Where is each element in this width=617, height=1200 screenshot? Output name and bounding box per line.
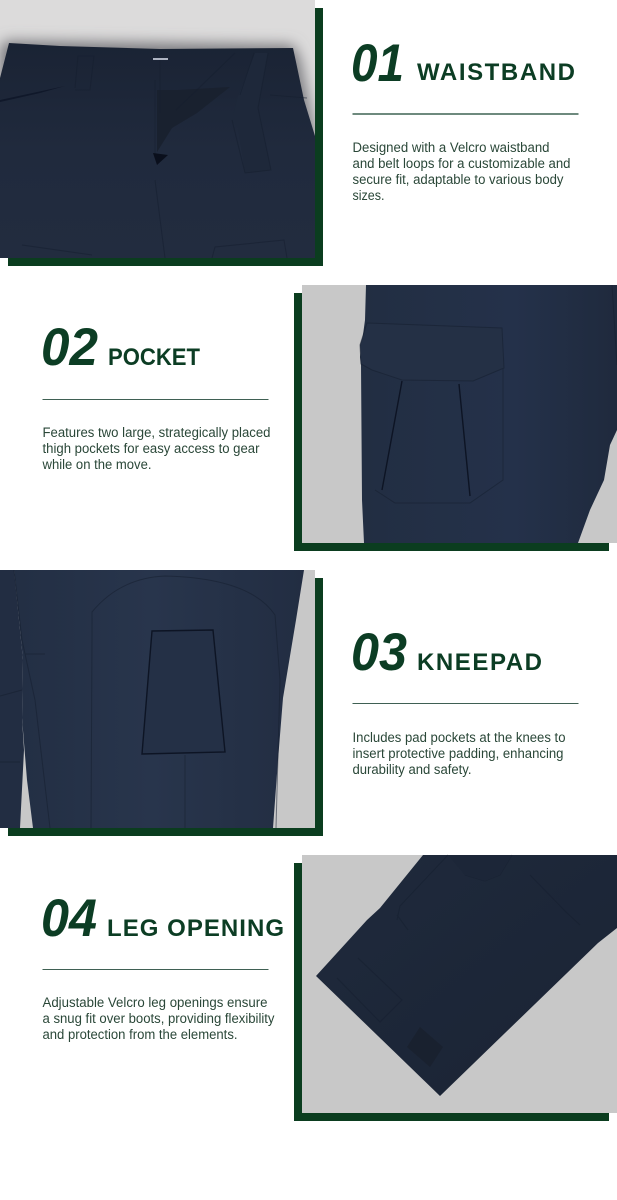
description: waistband: and belt loops for a customizable and — [352, 156, 570, 171]
description: kneepad — [352, 730, 566, 777]
heading: kneepad: KNEEPAD — [417, 649, 542, 676]
description: pocket: while on the move. — [42, 457, 152, 472]
description: kneepad: durability and safety. — [352, 762, 472, 777]
text block: 04 leg opening — [41, 889, 284, 1042]
description: kneepad: Includes pad pockets at the knees to — [352, 730, 566, 745]
number 04: 04 — [41, 889, 97, 948]
panel: leg opening feature — [294, 855, 617, 1121]
photo: leg opening — [302, 855, 617, 1113]
description: leg opening: Adjustable Velcro leg openings ensure — [42, 995, 268, 1010]
photo: waistband — [0, 0, 315, 258]
description: waistband — [352, 140, 570, 203]
number 02: 02 — [41, 318, 98, 377]
description: pocket: thigh pockets for easy access to gear — [42, 441, 260, 456]
panel: waistband feature — [0, 0, 323, 266]
description: leg opening — [42, 995, 275, 1042]
green frame: pocket photo — [294, 293, 609, 551]
panel: kneepad feature — [0, 570, 323, 836]
green frame: kneepad photo — [8, 578, 323, 836]
text block: 01 waistband — [351, 34, 578, 203]
green frame: leg opening photo — [294, 863, 609, 1121]
heading: pocket: POCKET — [108, 344, 200, 371]
description: pocket — [42, 425, 271, 472]
description: waistband: Designed with a Velcro waistband — [352, 140, 550, 155]
photo: pocket — [302, 285, 617, 543]
description: kneepad: insert protective padding, enhancing — [352, 746, 564, 761]
description: waistband: sizes. — [352, 188, 384, 203]
number 01: 01 — [351, 34, 404, 93]
description: pocket: Features two large, strategically placed — [42, 425, 270, 440]
photo: kneepad — [0, 570, 315, 828]
panel: pocket feature — [294, 285, 617, 551]
number 03: 03 — [351, 623, 407, 682]
heading: waistband: WAISTBAND — [417, 59, 575, 86]
description: waistband: secure fit, adaptable to various body — [352, 172, 564, 187]
green frame: waistband photo — [8, 8, 323, 266]
description: leg opening: and protection from the elements. — [42, 1027, 238, 1042]
heading: leg opening: LEG OPENING — [107, 915, 284, 942]
description: leg opening: a snug fit over boots, providing flexibility — [42, 1011, 275, 1026]
text block: 03 kneepad — [351, 623, 578, 777]
text block: 02 pocket — [41, 318, 270, 472]
